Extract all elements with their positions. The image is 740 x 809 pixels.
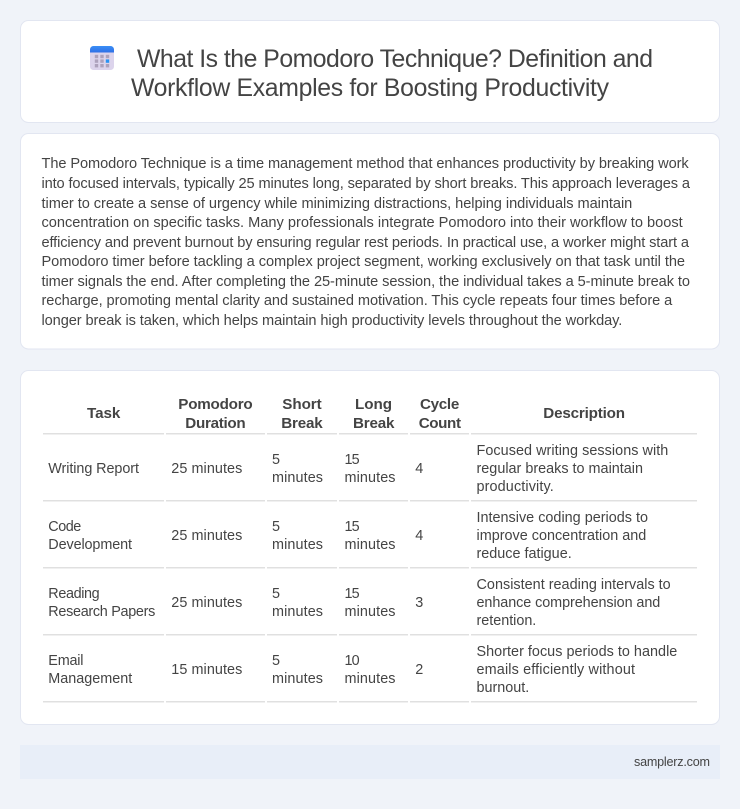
panel: introduction [20,134,720,349]
table row: reading research papers: Reading [48,586,100,602]
table row: email management: minutes [344,671,396,687]
table row: writing report: Writing Report [48,461,139,477]
table row: email management: minutes [272,671,323,687]
title: Workflow Examples for Boosting Productivity [131,75,610,102]
table header: Cycle [420,396,459,413]
table row: email management: emails efficiently without [476,662,635,678]
table header: Description [543,405,625,422]
text block: definition paragraph: timer signals the end. After completing the 25-minute session, the individual takes a 5-minute break to [42,274,690,290]
table header: Long [355,396,392,413]
table row: code development: Development [48,537,132,553]
table row: reading research papers: 3 [415,595,423,611]
table row: reading research papers: Research Papers [48,604,155,620]
text block: definition paragraph: recharge, promoting mental clarity and sustained motivation. This cycle repeats four times before a [42,293,673,309]
table row: code development: Intensive coding periods to [476,510,648,526]
table row: writing report: productivity. [476,479,554,495]
text block: definition paragraph: efficiency and prevent burnout by ensuring regular rest periods. In practical use, a worker might start a [42,235,690,251]
table row: code development: Code [48,519,81,535]
title [131,46,653,102]
table row: reading research papers: minutes [272,604,323,620]
table header: Pomodoro [178,396,253,413]
table row: writing report: minutes [344,470,396,486]
footer source text: samplerz.com [634,755,710,769]
table row: reading research papers: 15 [344,586,360,602]
footer [20,745,720,779]
panel: title card [20,20,720,122]
table row: reading research papers: enhance comprehension and [476,595,660,611]
table row: code development: 25 minutes [171,528,242,544]
table row: reading research papers: 25 minutes [171,595,242,611]
table row: email management: Management [48,671,132,687]
icon: calendar [90,46,114,70]
table row: code development: improve concentration and [476,528,646,544]
table row: writing report: minutes [272,470,323,486]
table row: writing report: 5 [272,452,280,468]
table row: code development: minutes [272,537,323,553]
table row: reading research papers: retention. [476,613,536,629]
table header [87,396,625,432]
table row: email management [48,644,677,696]
table row: email management: 10 [344,653,360,669]
table row: writing report: 4 [415,461,423,477]
table row: reading research papers: 5 [272,586,280,602]
table header: Count [419,415,461,432]
table row: email management: 5 [272,653,280,669]
table row: writing report: 25 minutes [171,461,242,477]
table header: Task [87,405,121,422]
table row: email management: Email [48,653,84,669]
table row: email management: Shorter focus periods to handle [476,644,677,660]
table header: Duration [185,415,246,432]
panel: workflow table [20,370,720,724]
table row: code development [48,510,648,562]
text block: definition paragraph: Pomodoro timer before tackling a complex project segment, working exclusively on that task until the [42,254,685,270]
table row: writing report: 15 [344,452,360,468]
table row: reading research papers: Consistent reading intervals to [476,577,671,593]
table row: email management: 15 minutes [171,662,242,678]
table row: code development: 5 [272,519,280,535]
table header: Break [281,415,323,432]
table header: Short [282,396,322,413]
text block: definition paragraph: longer break is taken, which helps maintain high productivity levels throughout the workday. [42,313,622,329]
table row: writing report: regular breaks to maintain [476,461,643,477]
text block: definition paragraph: concentration on specific tasks. Many professionals integrate Pomodoro into their workflow to boost [42,215,683,231]
text block: definition paragraph: timer to create a sense of urgency while minimizing distractions, helping individuals maintain [42,196,632,212]
table row: code development: 4 [415,528,423,544]
table row: reading research papers [48,577,671,629]
table row: code development: 15 [344,519,360,535]
table row: code development: minutes [344,537,396,553]
text block: definition paragraph: into focused intervals, typically 25 minutes long, separated by short breaks. This approach leverages a [42,176,691,192]
table row: reading research papers: minutes [344,604,396,620]
table header: Break [353,415,395,432]
table row: writing report [48,443,668,495]
text block: definition paragraph [42,156,691,329]
table row: code development: reduce fatigue. [476,546,572,562]
table row: writing report: Focused writing sessions with [476,443,668,459]
text block: definition paragraph: The Pomodoro Technique is a time management method that enhances productivity by breaking work [42,156,689,172]
table row: email management: 2 [415,662,423,678]
title: What Is the Pomodoro Technique? Definition and [137,46,653,73]
table row: email management: burnout. [476,680,529,696]
